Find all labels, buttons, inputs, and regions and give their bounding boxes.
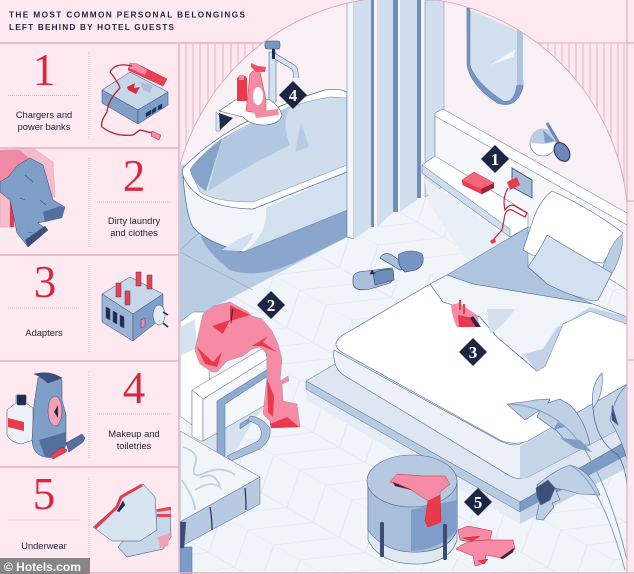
icon: laundry on chair — [0, 148, 65, 247]
row 5: underwear: 5 — [33, 469, 55, 519]
row 4: makeup and toiletries: Makeup and — [108, 429, 160, 439]
row 1: chargers and power banks: Chargers and — [16, 110, 72, 120]
wall socket with charger — [490, 168, 532, 244]
mattress and duvet — [334, 275, 627, 479]
icon: power bank — [102, 63, 168, 140]
faucet — [265, 41, 296, 102]
bath floor tile — [180, 164, 347, 322]
wall column panels — [347, 0, 444, 239]
chair — [180, 312, 270, 461]
bathtub body — [183, 170, 347, 252]
number marker 2 — [257, 291, 285, 319]
marble table — [180, 431, 260, 574]
nightstand shelf — [422, 156, 528, 237]
underwear on floor — [456, 526, 515, 566]
row 2: dirty laundry and clothes: 2 — [123, 151, 145, 201]
pink shirt on chair — [195, 302, 300, 428]
number marker 5: 5 — [474, 493, 482, 512]
underwear on ottoman — [390, 474, 450, 527]
number marker 3: 3 — [469, 343, 477, 362]
title: THE MOST COMMON PERSONAL BELONGINGS — [9, 10, 246, 20]
row 1: chargers and power banks: power banks — [18, 122, 71, 132]
title — [9, 10, 246, 32]
row 2: dirty laundry and clothes: Dirty laundry — [108, 216, 160, 226]
headboard — [422, 109, 627, 290]
row 5: underwear: Underwear — [21, 541, 67, 551]
back pillow — [523, 191, 623, 263]
wall stripes — [180, 43, 627, 210]
bathtub rim — [182, 89, 347, 209]
wall lamp — [530, 123, 573, 164]
right border — [627, 0, 634, 574]
slippers — [353, 251, 423, 290]
number marker 1: 1 — [491, 150, 499, 169]
number marker 2: 2 — [267, 296, 275, 315]
floor — [180, 235, 626, 572]
row 4: makeup and toiletries: 4 — [123, 363, 145, 413]
row 5: underwear — [8, 469, 171, 560]
icon: toiletries — [7, 373, 85, 459]
number marker 3 — [459, 338, 487, 366]
room scene — [180, 0, 627, 574]
row 4: makeup and toiletries: toiletries — [117, 441, 152, 451]
ottoman — [367, 455, 457, 564]
bed platform — [306, 364, 627, 524]
row 2: dirty laundry and clothes: and clothes — [110, 228, 158, 238]
row 2: dirty laundry and clothes — [0, 148, 170, 247]
number marker 1 — [481, 145, 509, 173]
number marker 4: 4 — [289, 86, 298, 105]
watermark: © Hotels.com — [4, 560, 81, 574]
row 1: chargers and power banks — [8, 45, 168, 140]
row 3: adapters: Adapters — [25, 328, 63, 338]
bathtub shadow — [201, 205, 347, 273]
row 3: adapters — [8, 257, 168, 352]
row 4: makeup and toiletries — [7, 363, 170, 459]
title: LEFT BEHIND BY HOTEL GUESTS — [9, 23, 175, 32]
mirror — [466, 8, 523, 105]
number marker 5 — [464, 488, 492, 516]
front pillow — [528, 235, 612, 301]
power bank on shelf — [462, 172, 494, 194]
arch outline — [180, 0, 627, 204]
plant — [507, 373, 627, 570]
row 1: chargers and power banks: 1 — [33, 45, 55, 95]
icon: socks and underwear — [93, 484, 171, 557]
red adapter on bed — [451, 300, 481, 327]
tub shelf with toiletries — [216, 63, 282, 131]
bathtub basin — [190, 97, 347, 202]
icon: travel adapter — [102, 272, 168, 341]
number marker 4 — [279, 81, 307, 109]
bathtub — [182, 89, 347, 273]
row 3: adapters: 3 — [34, 257, 56, 307]
blue bedsheet — [447, 227, 593, 304]
